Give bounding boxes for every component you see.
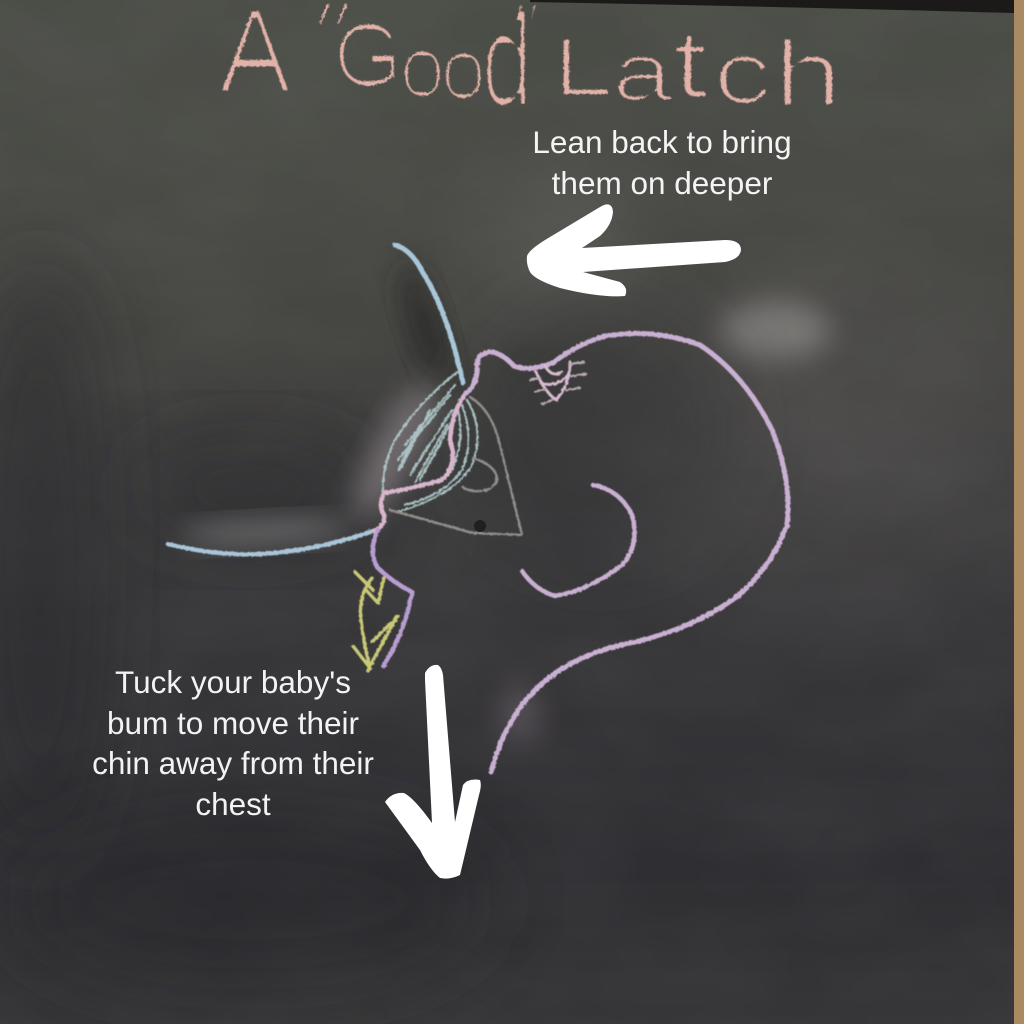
breast outline: upper arm of nipple line: [395, 245, 463, 383]
title: A "Good" Latch: c: [713, 24, 772, 122]
callout: tuck bum: Tuck your baby's: [115, 664, 351, 700]
board frame: right edge: [1014, 0, 1024, 1024]
inner mouth triangle: [390, 397, 522, 535]
mouth roof and tongue: pink: [374, 392, 467, 531]
nose and head outline: [466, 333, 788, 772]
callout: tuck bum: chin away from their: [92, 745, 374, 781]
ear: [522, 485, 634, 596]
board frame: top edge: [530, 0, 1014, 13]
neck creases: yellow: [353, 572, 398, 671]
callout: lean back: Lean back to bring: [532, 124, 792, 160]
title: A "Good" Latch: t: [672, 11, 708, 118]
title: A "Good" Latch: a: [612, 26, 674, 118]
breast tissue hatching inside mouth: [383, 370, 477, 512]
callout: lean back: them on deeper: [552, 165, 772, 201]
title: A "Good" Latch: [219, 0, 843, 134]
title: A "Good" Latch: o: [440, 22, 487, 116]
title: A "Good" Latch: G: [333, 6, 403, 106]
callout: tuck bum: [92, 664, 374, 822]
eyelashes: [530, 362, 586, 404]
arrow: left: [527, 204, 741, 296]
callout: tuck bum: bum to move their: [107, 705, 359, 741]
breast outline: lower line: [168, 530, 376, 554]
mouth dot: [474, 520, 486, 532]
callout: lean back: [532, 124, 792, 201]
small throat loop: [463, 458, 497, 491]
arrow: down: [385, 665, 481, 879]
eye: [536, 362, 570, 400]
title: A "Good" Latch: o: [399, 20, 446, 114]
callout: tuck bum: chest: [195, 786, 271, 822]
baby drawing: [168, 245, 788, 772]
title: A "Good" Latch: h: [774, 23, 843, 125]
chin: [373, 530, 412, 666]
title: A "Good" Latch: L: [552, 21, 614, 113]
